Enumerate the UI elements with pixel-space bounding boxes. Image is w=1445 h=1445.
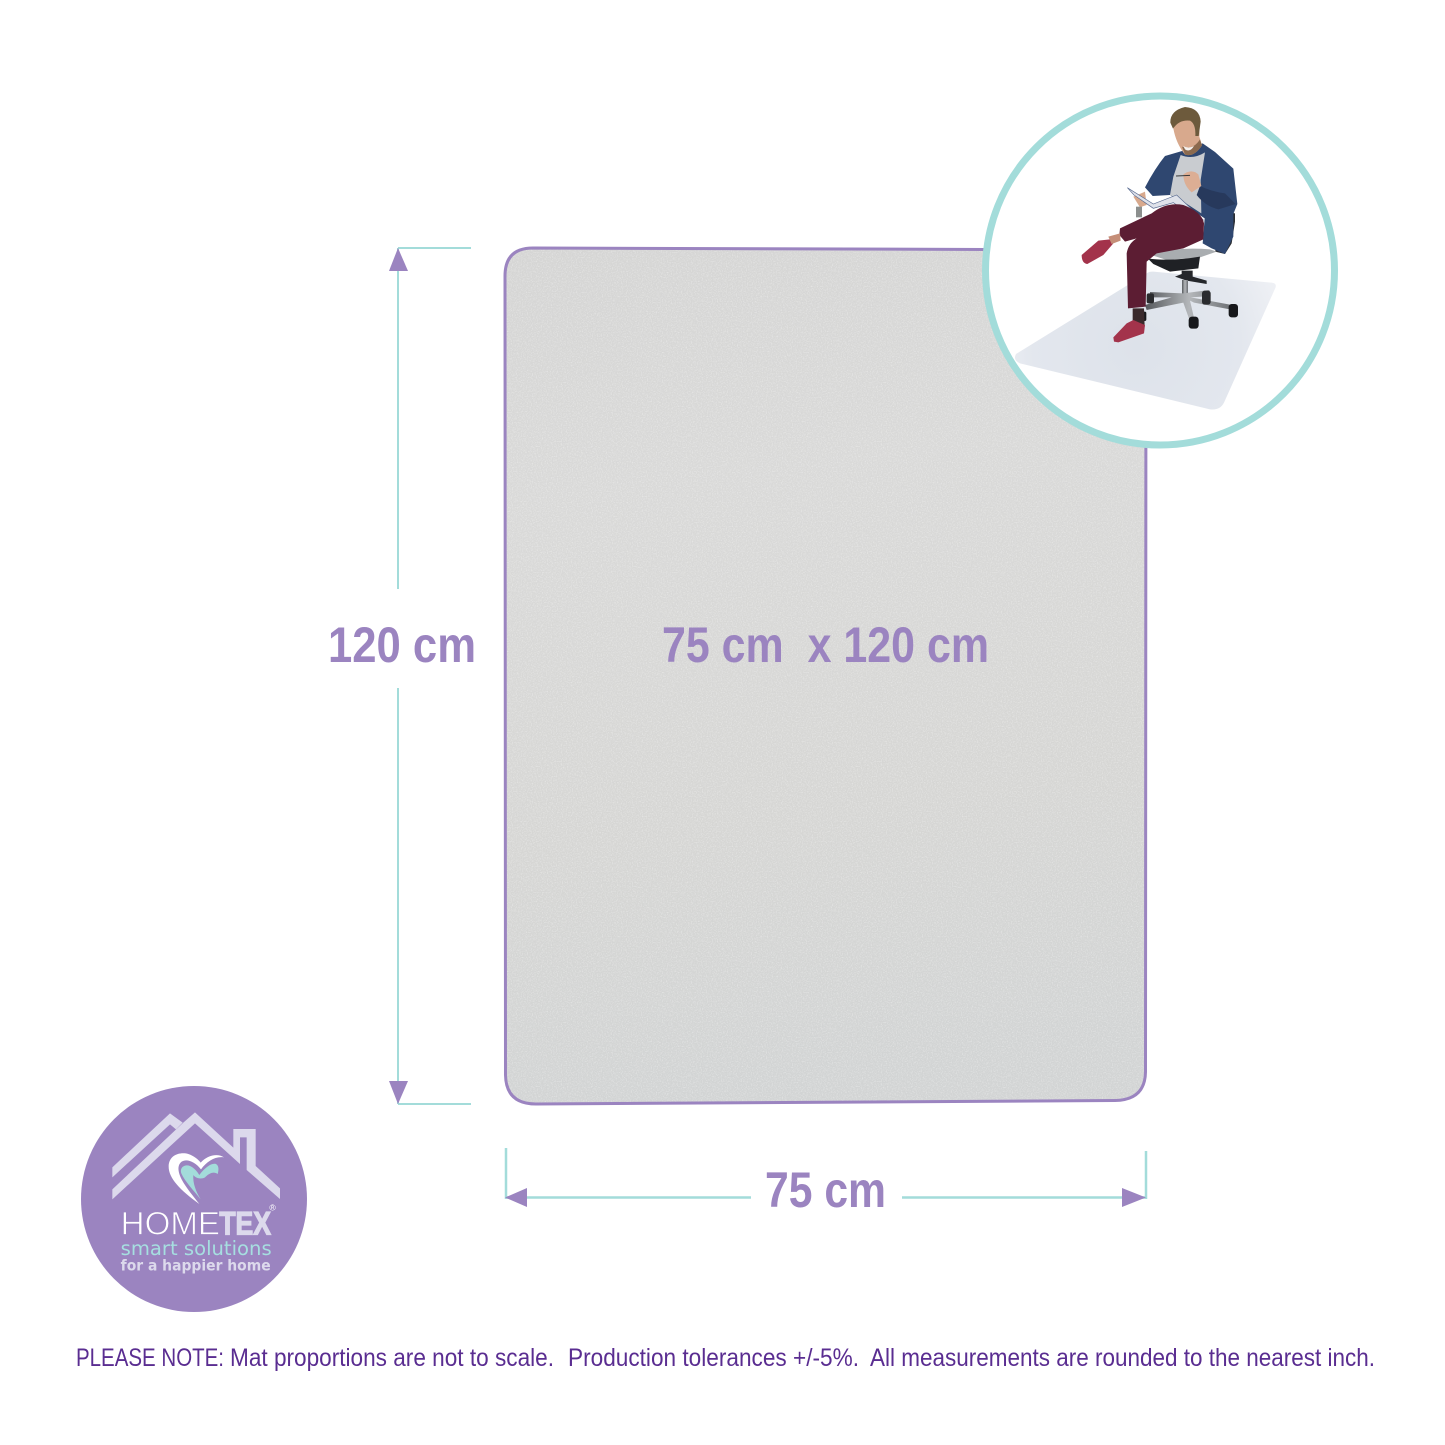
ankle	[1108, 233, 1121, 244]
inset illustration	[1015, 107, 1276, 410]
height label: 120 cm	[328, 617, 476, 673]
book	[1127, 188, 1203, 223]
brand name: TEX	[219, 1204, 271, 1241]
hand with pen	[1176, 171, 1201, 192]
t-shirt	[1170, 152, 1205, 213]
raised shoe	[1082, 239, 1113, 264]
beard and smile	[1182, 139, 1202, 155]
chair mat	[505, 248, 1146, 1104]
Hometex logo badge	[81, 1086, 307, 1312]
badge circle	[81, 1086, 307, 1312]
width dimension arrow	[505, 1148, 1146, 1207]
footnote: All measurements are rounded to the nearest inch.	[870, 1344, 1375, 1372]
planted shoe	[1113, 320, 1145, 342]
brand name: ®	[269, 1203, 276, 1213]
left hand	[1133, 192, 1147, 207]
heart icon	[169, 1153, 224, 1204]
inset circle: person on chair mat	[986, 96, 1334, 445]
office chair	[1142, 210, 1238, 329]
tagline 2: for a happier home	[121, 1257, 271, 1275]
trousers	[1119, 204, 1204, 308]
jacket	[1145, 143, 1237, 254]
footnote: PLEASE NOTE:	[76, 1344, 224, 1372]
brand name: HOME	[121, 1204, 220, 1241]
head	[1173, 117, 1202, 155]
hair	[1170, 107, 1201, 136]
mat size label: 75 cm x 120 cm	[662, 617, 989, 673]
chair arm post	[1136, 207, 1142, 217]
footnote: Mat proportions are not to scale.	[230, 1344, 554, 1372]
forearm sleeve	[1197, 186, 1236, 209]
lower ankle	[1133, 308, 1145, 327]
footnote: Production tolerances +/-5%.	[568, 1344, 859, 1372]
floor mat	[1015, 272, 1276, 410]
height dimension arrow	[389, 248, 471, 1104]
footnote	[76, 1344, 1375, 1372]
tagline 1: smart solutions	[121, 1237, 272, 1260]
width label: 75 cm	[765, 1162, 886, 1218]
brand name	[121, 1203, 276, 1241]
roof	[112, 1112, 280, 1199]
